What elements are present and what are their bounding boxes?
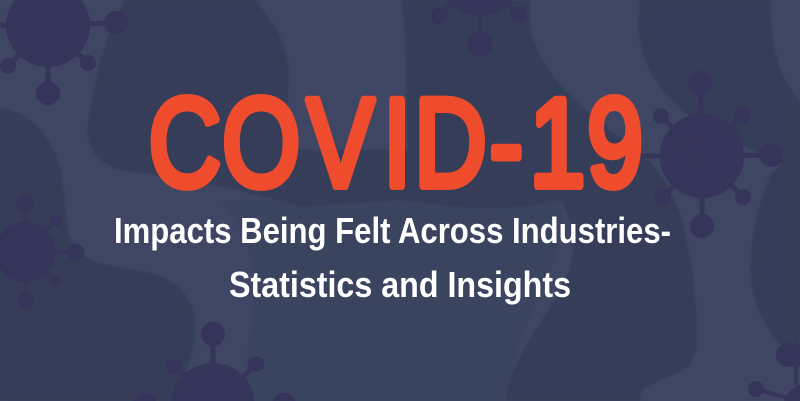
subtitle line 1: Impacts Being Felt Across Industries- [114, 210, 671, 251]
title: COVID-19 [149, 73, 643, 213]
virus: bottom centre [134, 322, 295, 401]
virus: top left [0, 0, 128, 105]
virus: right [640, 71, 783, 238]
virus: bottom right [748, 343, 800, 401]
subtitle line 2: Statistics and Insights [229, 264, 571, 305]
virus: top centre [431, 0, 527, 56]
virus: left [0, 194, 84, 310]
